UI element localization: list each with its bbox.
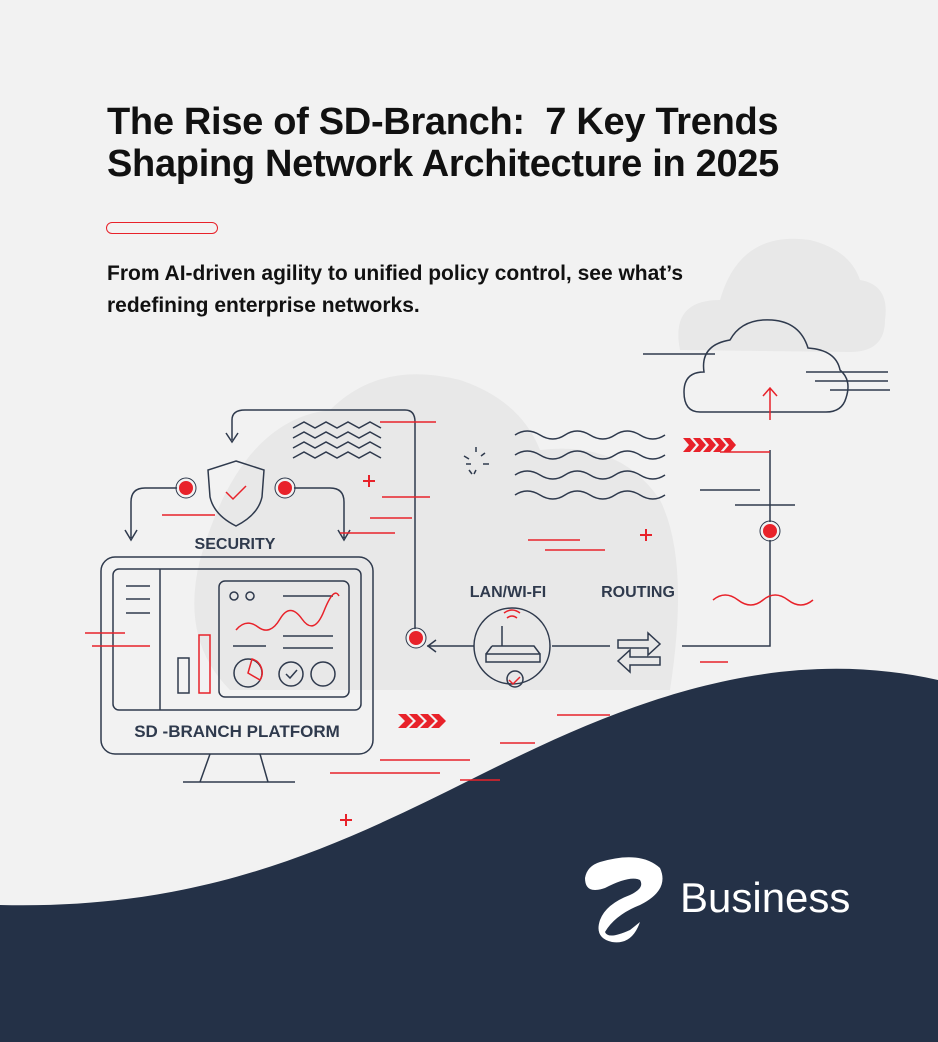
title	[107, 101, 779, 185]
routing arrows	[618, 633, 660, 655]
logo	[585, 857, 662, 942]
cloud outline	[684, 320, 848, 412]
text: LAN/WI-FI	[470, 584, 546, 601]
divider pill	[106, 222, 218, 234]
title: The Rise of SD-Branch: 7 Key Trends	[107, 101, 778, 143]
text: Business	[680, 874, 850, 921]
dark wave	[0, 669, 938, 1042]
background clouds	[194, 239, 886, 690]
shield	[208, 461, 264, 526]
router circle	[474, 608, 550, 684]
text: SECURITY	[195, 536, 276, 553]
connectors	[232, 410, 415, 636]
text: SD -BRANCH PLATFORM	[134, 722, 340, 741]
zigzags	[293, 422, 381, 458]
subtitle	[107, 262, 683, 317]
title: Shaping Network Architecture in 2025	[107, 143, 779, 185]
monitor	[101, 557, 373, 754]
subtitle: From AI-driven agility to unified policy control, see what’s	[107, 262, 683, 285]
red details	[85, 388, 813, 826]
text: ROUTING	[601, 584, 675, 601]
subtitle: redefining enterprise networks.	[107, 294, 420, 317]
